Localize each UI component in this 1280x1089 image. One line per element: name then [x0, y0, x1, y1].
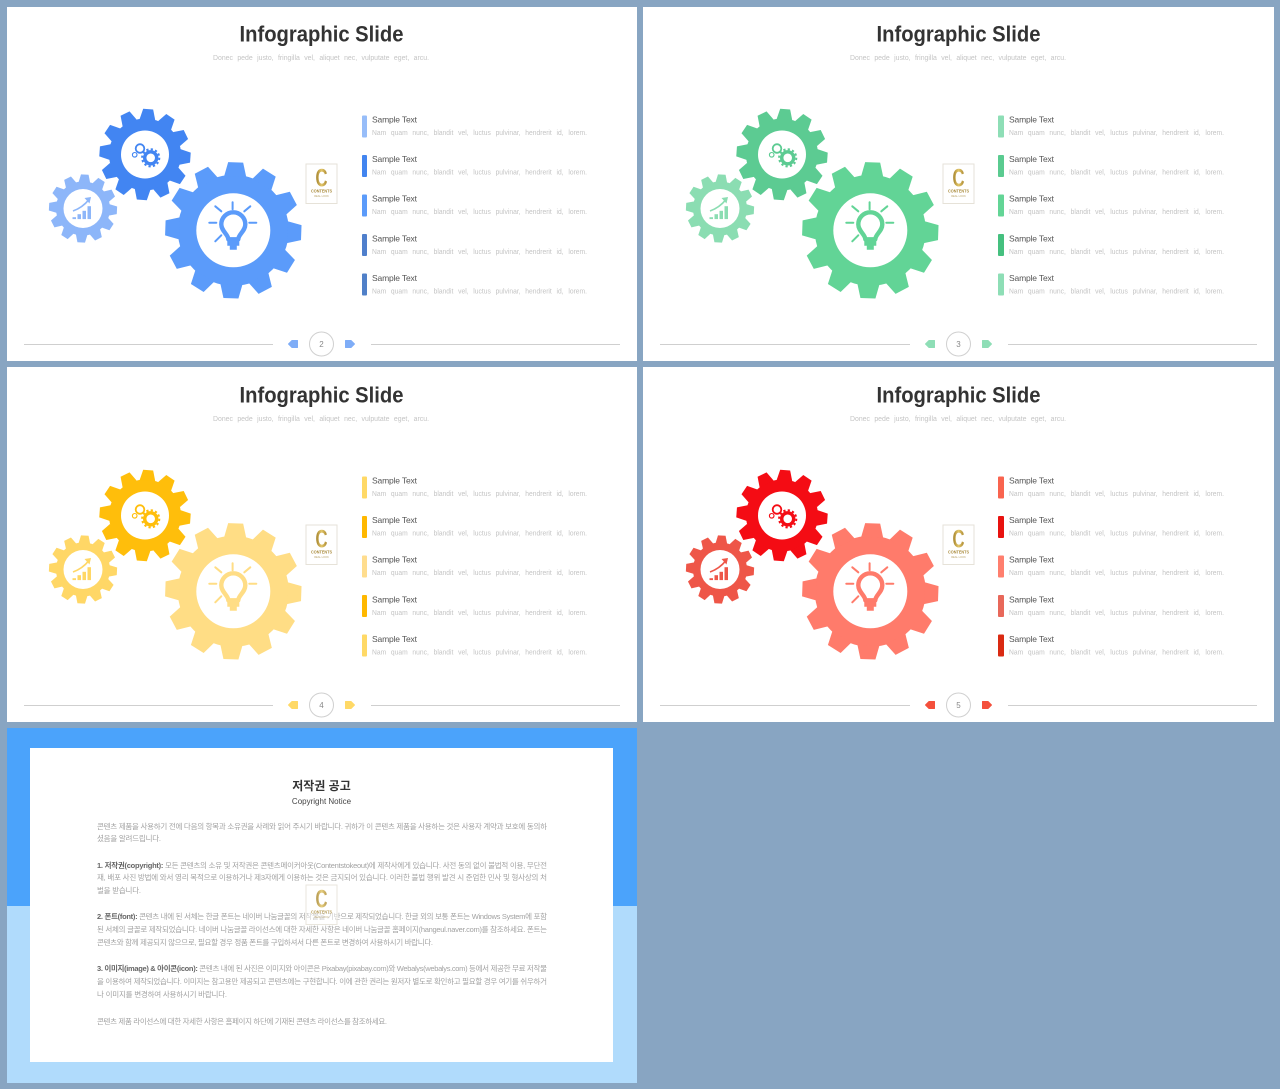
list item 2 [998, 154, 1224, 177]
logo: contents: C [316, 164, 328, 192]
logo: contents [943, 164, 974, 204]
list item 3 [998, 554, 1224, 578]
list item 2: Sample Text [1009, 154, 1055, 164]
logo: contents watermark: REAL LOOK [314, 915, 329, 919]
list item 3 [362, 194, 587, 216]
title: Infographic Slide [876, 22, 1040, 46]
logo: contents watermark [306, 885, 337, 924]
list item 4: Nam quam nunc, blandit vel, luctus pulvinar, hendrerit id, lorem. [372, 249, 587, 256]
panel: yellow slide [7, 367, 637, 722]
icon: medium gear with cogs [736, 470, 828, 561]
list item 2: Sample Text [372, 154, 418, 164]
list item 5: Sample Text [372, 273, 418, 283]
section 1: copyright: 1. 저작권(copyright): 모든 콘텐츠의 소유 및 저작권은 콘텐츠메이커아웃(Contentstokeout)에 제작사에게 있습니다. 사전 동의 없이 불법적 이용, 무단전 [97, 860, 547, 870]
list item 1: Nam quam nunc, blandit vel, luctus pulvinar, hendrerit id, lorem. [372, 491, 587, 498]
logo: contents watermark: CONTENTS [311, 910, 332, 914]
logo: contents [306, 525, 337, 564]
icon: medium gear with cogs [99, 109, 191, 200]
icon: medium gear with cogs [736, 109, 828, 200]
panel: red slide [643, 367, 1274, 722]
list item 4: Sample Text [372, 594, 418, 604]
logo: contents: REAL LOOK [314, 555, 329, 559]
subtitle: Donec pede justo, fringilla vel, aliquet nec, vulputate eget, arcu. [850, 55, 1066, 62]
list item 2 [998, 515, 1224, 538]
icon: small gear with chart [686, 535, 754, 604]
list item 4: Sample Text [1009, 594, 1055, 604]
intro paragraph: 셨음을 알려드립니다. [97, 833, 161, 843]
pager: 3 [956, 340, 961, 349]
logo: contents [943, 525, 974, 564]
list item 2: Nam quam nunc, blandit vel, luctus pulvinar, hendrerit id, lorem. [1009, 530, 1224, 538]
list item 5 [998, 634, 1224, 656]
list item 1: Sample Text [372, 114, 418, 124]
logo: contents [306, 164, 337, 204]
section 2: font: 2. 폰트(font): 콘텐츠 내에 된 서체는 한글 폰트는 네이버 나눔글꼴의 저작물을 기반으로 제작되었습니다. 한글 외의 보통 폰트는 Windows System에 포함 [97, 911, 547, 921]
list item 4 [362, 594, 587, 617]
section 3: image and icon: 을 이용하여 제작되었습니다. 이미지는 참고용만 제공되고 콘텐츠에는 구현합니다. 이에 관한 권리는 원저자 별도로 확인하고 필요할 경우 여기를 쉬우하거 [97, 976, 547, 986]
icon: large gear with light bulb [802, 523, 939, 660]
list item 5 [998, 273, 1224, 296]
pager [24, 332, 620, 356]
list item 2 [362, 515, 587, 538]
list item 5: Nam quam nunc, blandit vel, luctus pulvinar, hendrerit id, lorem. [1009, 288, 1224, 296]
subtitle: Donec pede justo, fringilla vel, aliquet nec, vulputate eget, arcu. [213, 55, 429, 62]
subtitle: Donec pede justo, fringilla vel, aliquet nec, vulputate eget, arcu. [213, 416, 429, 423]
section 1: copyright: 재, 배포 사진 방법에 와서 영리 목적으로 이용하거나 제3자에게 이용하는 것은 금지되어 있습니다. 이러한 불법 행위 발견 시 준엄한 민사 및 형사상의 처 [97, 872, 547, 882]
list item 1 [998, 114, 1224, 138]
logo: contents: REAL LOOK [951, 194, 966, 198]
subtitle: Donec pede justo, fringilla vel, aliquet nec, vulputate eget, arcu. [850, 416, 1066, 423]
list item 2: Nam quam nunc, blandit vel, luctus pulvinar, hendrerit id, lorem. [1009, 170, 1224, 176]
list item 5: Nam quam nunc, blandit vel, luctus pulvinar, hendrerit id, lorem. [372, 288, 587, 296]
list item 3: Nam quam nunc, blandit vel, luctus pulvinar, hendrerit id, lorem. [1009, 209, 1224, 216]
list item 3 [998, 194, 1224, 216]
closing line: 콘텐츠 제품 라이선스에 대한 자세한 사항은 홈페이지 하단에 기재된 콘텐츠 라이선스를 참조하세요. [97, 1016, 387, 1026]
section 3: image and icon: 3. 이미지(image) & 아이콘(icon): 콘텐츠 내에 된 사진은 이미지와 아이콘은 Pixabay(pixabay.com)와 Webalys(webalys.com) 등에서 제공한 무료 저작물 [97, 963, 547, 973]
pager: 2 [319, 340, 324, 349]
icon: large gear with light bulb [165, 523, 302, 660]
list item 5: Nam quam nunc, blandit vel, luctus pulvinar, hendrerit id, lorem. [1009, 650, 1224, 656]
panel: copyright notice [7, 728, 637, 1083]
list item 5 [362, 273, 587, 296]
list item 4 [362, 234, 587, 256]
list item 1 [998, 476, 1224, 498]
logo: contents: CONTENTS [311, 188, 332, 194]
logo: contents: REAL LOOK [314, 194, 329, 198]
list item 4: Nam quam nunc, blandit vel, luctus pulvinar, hendrerit id, lorem. [1009, 249, 1224, 256]
logo: contents: REAL LOOK [951, 555, 966, 559]
icon: small gear with chart [686, 174, 754, 243]
title: Infographic Slide [876, 382, 1040, 408]
section 2: font [97, 911, 547, 947]
section 2: font: 콘텐츠와 함께 제공되지 않으므로, 필요할 경우 정품 폰트를 구입하셔서 다른 폰트로 변경하여 사용하시기 바랍니다. [97, 937, 433, 947]
list item 2 [362, 154, 587, 177]
list item 3: Sample Text [1009, 554, 1055, 564]
panel: green slide [643, 7, 1274, 361]
list item 1: Nam quam nunc, blandit vel, luctus pulvinar, hendrerit id, lorem. [1009, 491, 1224, 498]
icon: large gear with light bulb [165, 162, 302, 299]
icon: medium gear with cogs [99, 470, 191, 561]
section 1: copyright [97, 860, 547, 895]
pager [660, 332, 1257, 356]
list item 3: Nam quam nunc, blandit vel, luctus pulvinar, hendrerit id, lorem. [372, 209, 587, 216]
list item 3: Nam quam nunc, blandit vel, luctus pulvinar, hendrerit id, lorem. [1009, 570, 1224, 577]
icon: small gear with chart [49, 174, 117, 243]
section 2: font: 된 서체의 글꼴로 제작되었습니다. 네이버 나눔글꼴 라이선스에 대한 자세한 사항은 네이버 나눔글꼴 홈페이지(hangeul.naver.com)를 참조하세요. 폰트는 [97, 924, 547, 934]
list item 5: Nam quam nunc, blandit vel, luctus pulvinar, hendrerit id, lorem. [372, 650, 587, 656]
logo: contents: C [316, 526, 328, 554]
list item 3 [362, 554, 587, 578]
list item 1: Sample Text [372, 476, 418, 486]
list item 1: Sample Text [1009, 476, 1055, 486]
pager: 5 [956, 701, 961, 710]
list item 5: Sample Text [1009, 634, 1055, 644]
title: Infographic Slide [240, 22, 404, 46]
copyright subheading: Copyright Notice [292, 797, 352, 806]
logo: contents: CONTENTS [948, 188, 969, 194]
list item 5: Sample Text [372, 634, 418, 644]
list item 3: Nam quam nunc, blandit vel, luctus pulvinar, hendrerit id, lorem. [372, 570, 587, 577]
title: Infographic Slide [240, 382, 404, 408]
logo: contents: C [952, 164, 964, 192]
pager [660, 693, 1257, 717]
list item 1 [362, 476, 587, 498]
icon: large gear with light bulb [802, 162, 939, 299]
list item 4: Nam quam nunc, blandit vel, luctus pulvinar, hendrerit id, lorem. [372, 610, 587, 617]
intro paragraph: 콘텐츠 제품을 사용하기 전에 다음의 항목과 소유권을 사례와 읽어 주시기 바랍니다. 귀하가 이 콘텐츠 제품을 사용하는 것은 사용자 계약과 보호에 동의하 [97, 821, 547, 831]
list item 4: Sample Text [1009, 234, 1055, 244]
list item 1: Sample Text [1009, 114, 1055, 124]
logo: contents: C [952, 526, 964, 554]
list item 4: Nam quam nunc, blandit vel, luctus pulvinar, hendrerit id, lorem. [1009, 610, 1224, 617]
list item 1: Nam quam nunc, blandit vel, luctus pulvinar, hendrerit id, lorem. [372, 130, 587, 137]
list item 4 [998, 594, 1224, 617]
intro paragraph [97, 821, 547, 843]
logo: contents: CONTENTS [311, 550, 332, 554]
section 3: image and icon: 나 이미지를 변경하여 사용하시기 바랍니다. [97, 989, 227, 999]
list item 2: Nam quam nunc, blandit vel, luctus pulvinar, hendrerit id, lorem. [372, 530, 587, 538]
list item 5: Sample Text [1009, 273, 1055, 283]
copyright heading: 저작권 공고 [292, 778, 351, 793]
list item 2: Sample Text [372, 515, 418, 525]
icon: small gear with chart [49, 535, 117, 604]
list item 2: Nam quam nunc, blandit vel, luctus pulvinar, hendrerit id, lorem. [372, 170, 587, 176]
panel: blue slide [7, 7, 637, 361]
list item 4 [998, 234, 1224, 256]
list item 3: Sample Text [372, 554, 418, 564]
list item 3: Sample Text [372, 194, 418, 204]
logo: contents watermark: C [316, 886, 328, 914]
pager: 4 [319, 701, 324, 710]
list item 3: Sample Text [1009, 194, 1055, 204]
list item 1: Nam quam nunc, blandit vel, luctus pulvinar, hendrerit id, lorem. [1009, 130, 1224, 137]
pager [24, 693, 620, 717]
section 1: copyright: 벌을 받습니다. [97, 885, 141, 895]
list item 1 [362, 114, 587, 138]
list item 5 [362, 634, 587, 656]
list item 2: Sample Text [1009, 515, 1055, 525]
logo: contents: CONTENTS [948, 550, 969, 554]
list item 4: Sample Text [372, 234, 418, 244]
section 3: image and icon [97, 963, 547, 999]
